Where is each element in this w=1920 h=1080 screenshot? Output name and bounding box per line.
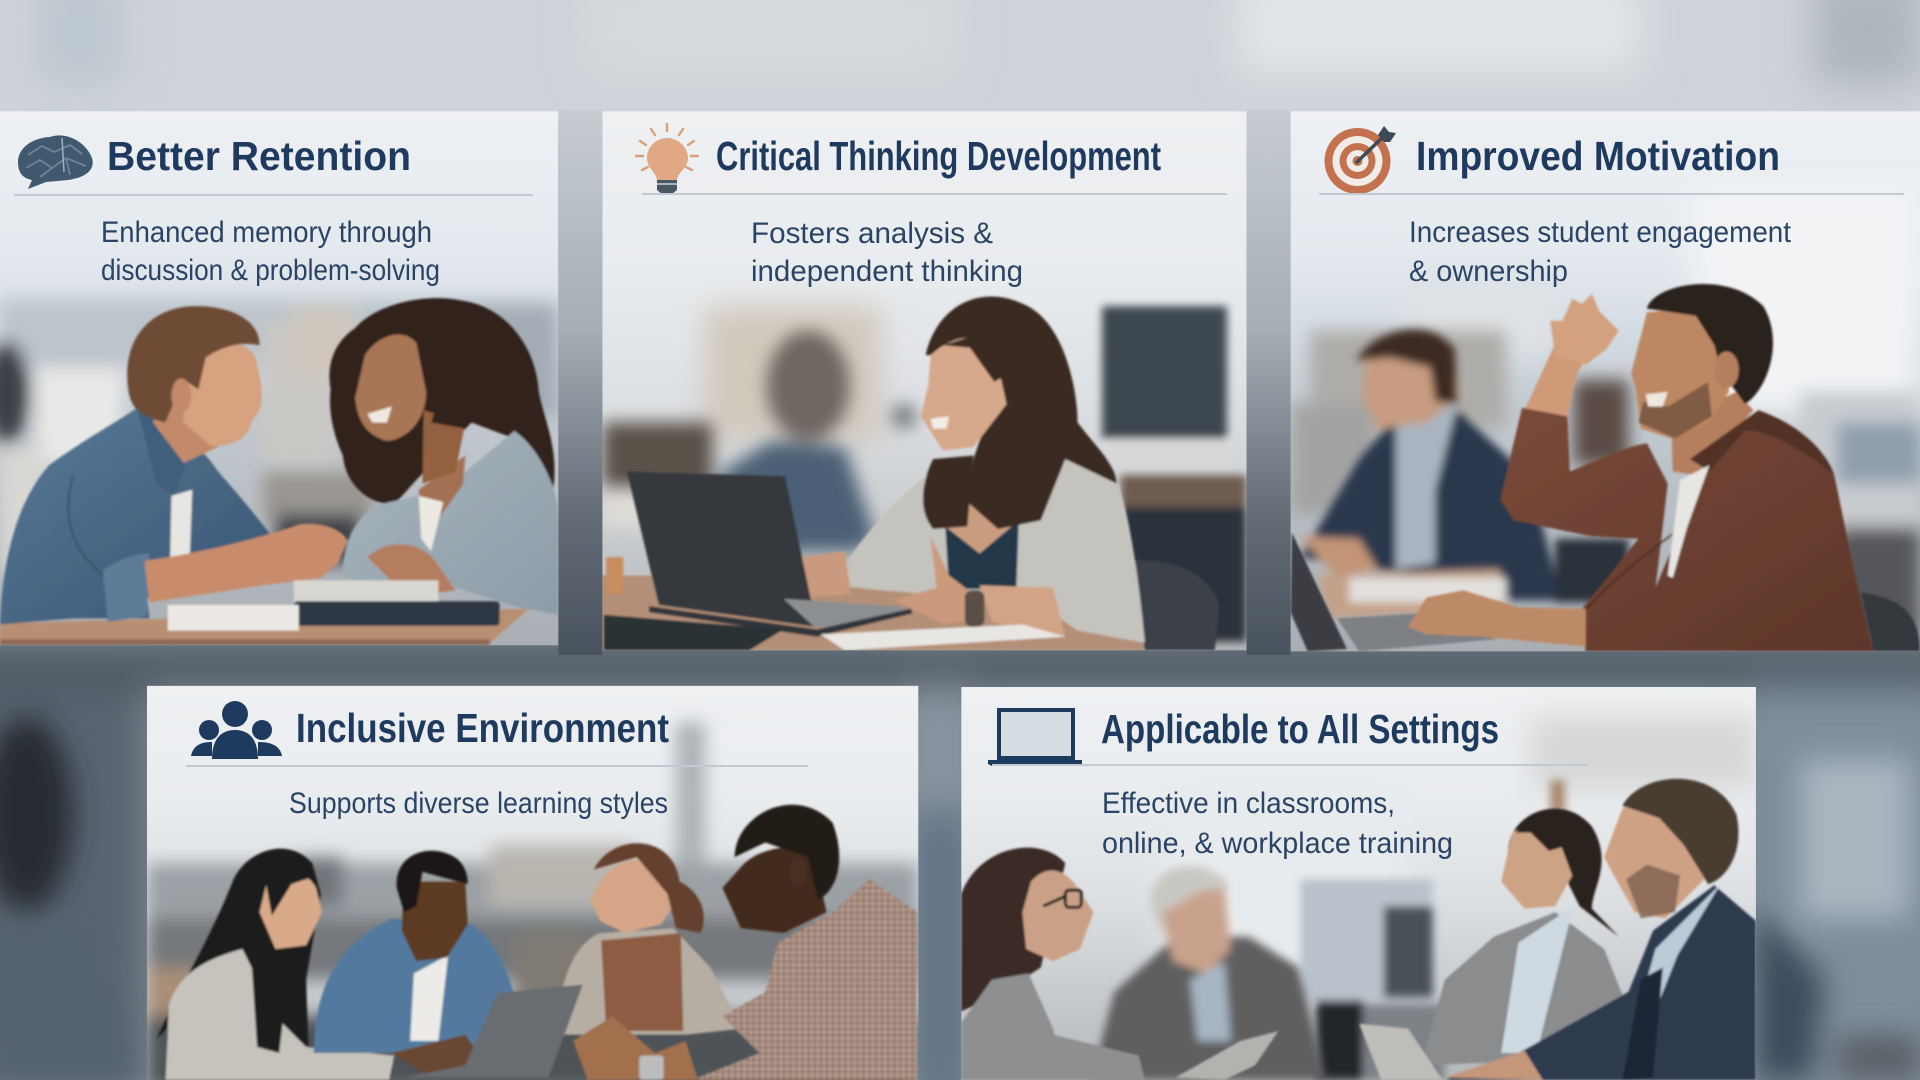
woman neck [422,410,465,484]
panel: better retention [0,110,558,647]
hair [1647,284,1773,404]
paper [820,624,1065,650]
panel: applicable to all settings [961,687,1757,1080]
panel: improved motivation [1289,110,1920,653]
arm [802,551,851,598]
panel: critical thinking development [601,110,1248,651]
front tablet [1359,1024,1442,1080]
description: Fosters analysis & [751,217,993,250]
older man [1091,937,1326,1080]
woman body [343,431,558,615]
folder [604,615,784,650]
man neck and face [152,404,220,464]
books [294,580,438,602]
woman hair front [430,412,467,430]
man denim [313,918,522,1053]
laptop [404,984,583,1078]
header: critical thinking [636,124,1227,288]
woman 1 hair [157,849,321,1053]
lower forearm and hand [1408,590,1586,647]
man plaid [692,879,917,1080]
head [1631,306,1729,438]
icon: brain [18,135,93,189]
raised forearm [1524,331,1592,416]
photo: woman at laptop [601,110,1248,651]
cardigan [833,443,1145,643]
title: Better Retention [107,133,411,179]
description: Increases student engagement [1409,216,1792,249]
right woman [1420,912,1636,1065]
title: Improved Motivation [1416,133,1780,179]
description: Supports diverse learning styles [289,787,668,820]
woman with glasses [961,848,1065,1065]
woman brown hair [558,928,742,1035]
woman face [355,334,426,441]
photo: man raising hand [1289,110,1920,653]
title: Applicable to All Settings [1101,706,1499,752]
laptop [627,471,817,627]
face [921,338,1007,451]
description: independent thinking [751,255,1023,288]
title: Inclusive Environment [296,705,669,751]
icon: target with arrow [1325,126,1396,194]
top [945,520,1019,589]
panel: inclusive environment [147,686,918,1080]
woman hair [329,298,555,504]
icon: group of people [191,701,282,759]
photo: two students talking [0,110,558,647]
chair [1129,560,1220,650]
hair [926,297,1117,529]
description: & ownership [1409,255,1568,288]
header: inclusive environment [186,701,808,820]
description: Effective in classrooms, [1102,787,1395,820]
man shirt [0,408,291,624]
desk [601,576,1176,650]
description: discussion & problem-solving [101,254,440,287]
description: online, & workplace training [1102,827,1453,860]
man arm [144,524,348,602]
icon: laptop [988,710,1082,766]
header: improved motivation [1319,126,1904,288]
right man [1445,885,1756,1080]
table [0,609,529,645]
header: applicable to all settings [988,706,1588,860]
woman 1 sweater [165,949,394,1080]
description: Enhanced memory through [101,216,432,249]
chair [1861,593,1920,651]
neck [1671,392,1753,475]
woman hand [367,544,456,594]
hoodie [1500,408,1873,651]
icon: light bulb [636,124,698,194]
photo: workplace meeting [961,687,1757,1080]
tablet [1176,1031,1278,1080]
tee [1668,465,1709,578]
laptop [1291,533,1347,651]
header: better retention [14,133,533,287]
photo: four students [147,686,918,1080]
title: Critical Thinking Development [716,133,1161,179]
